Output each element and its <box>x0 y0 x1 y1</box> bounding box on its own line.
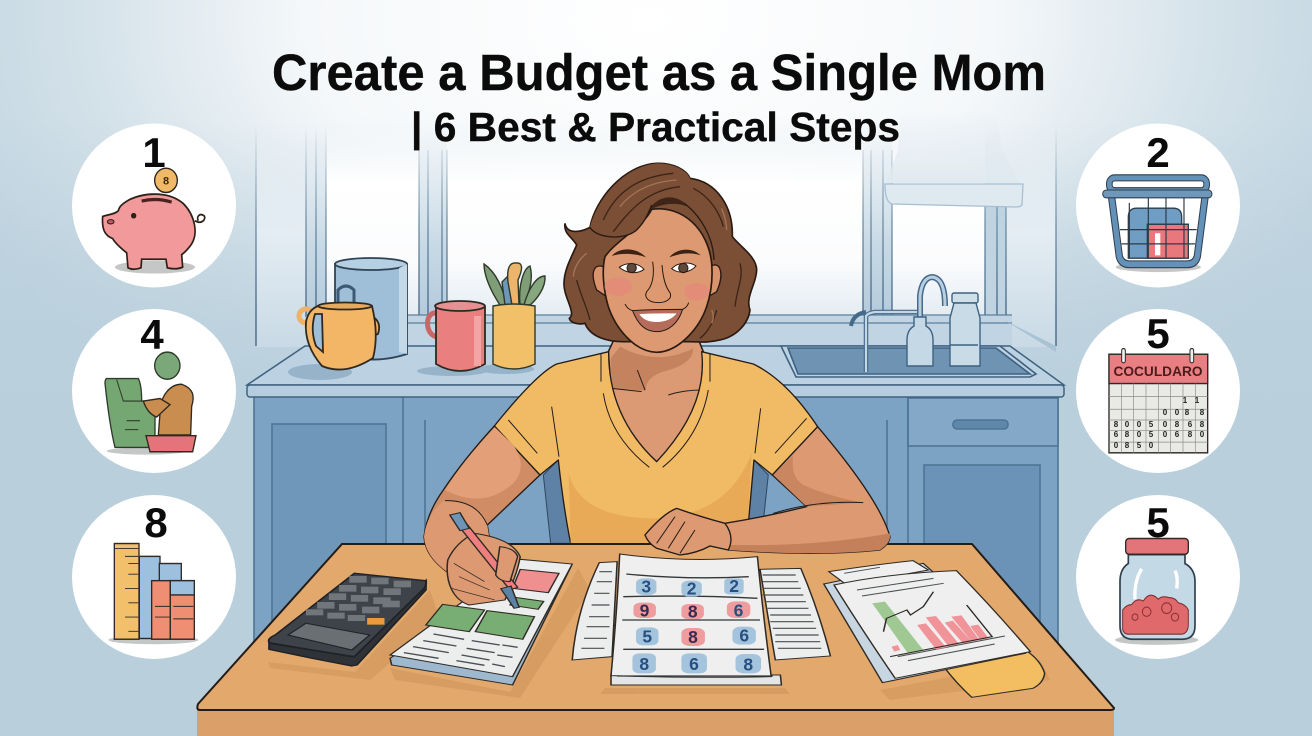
calendar days: 5 <box>1149 420 1154 429</box>
calendar days: 0 <box>1175 408 1180 417</box>
faucet <box>851 277 945 372</box>
calendar days: 8 <box>1188 430 1193 439</box>
worksheet numbers: 6 <box>739 626 749 646</box>
sink <box>781 346 1036 377</box>
range hood <box>885 110 1023 207</box>
worksheet numbers: 8 <box>743 654 753 674</box>
table <box>197 544 1114 736</box>
step badge: calendar: 5 <box>1146 310 1170 357</box>
kitchen background <box>247 110 1064 646</box>
calculator <box>269 573 426 666</box>
calendar days: 0 <box>1200 430 1205 439</box>
worksheet numbers: 3 <box>641 577 651 597</box>
mouth <box>633 309 683 332</box>
step badge: stacked books: 8 <box>144 499 168 546</box>
chair back <box>543 460 768 543</box>
worksheet numbers: 2 <box>687 579 697 599</box>
worksheet numbers: 5 <box>642 626 652 646</box>
worksheet highlights <box>632 578 761 673</box>
step badge: piggy bank <box>72 124 236 288</box>
calendar days: 8 <box>1175 420 1180 429</box>
worksheet numbers: 8 <box>688 627 698 647</box>
step badge: piggy bank: 1 <box>142 129 166 176</box>
ears <box>593 265 721 297</box>
calendar days: 5 <box>1149 430 1154 439</box>
eyes <box>619 263 696 273</box>
coin glyph: 8 <box>163 176 169 188</box>
right arm <box>725 427 890 553</box>
calendar days: 8 <box>1125 430 1130 439</box>
calendar days: 0 <box>1137 430 1142 439</box>
calendar days: 6 <box>1175 430 1180 439</box>
worksheet <box>611 554 781 685</box>
cup: large blue <box>335 258 407 360</box>
step badge: shopping basket <box>1076 124 1240 288</box>
calendar days: 0 <box>1137 420 1142 429</box>
step badge: shopping basket: 2 <box>1146 129 1170 176</box>
hair <box>564 163 757 342</box>
window <box>256 115 1056 352</box>
worksheet numbers: 6 <box>689 654 699 674</box>
worksheet numbers: 9 <box>640 600 650 620</box>
writing hand <box>447 513 520 608</box>
worksheet back pages <box>572 562 830 660</box>
calendar days: 0 <box>1125 420 1130 429</box>
title line 2: | 6 Best & Practical Steps <box>411 104 900 150</box>
worksheet numbers <box>639 576 753 674</box>
nose <box>646 262 671 303</box>
arms <box>424 426 890 573</box>
woman upper body <box>494 327 818 543</box>
calendar days: 8 <box>1125 441 1130 450</box>
counter shadows <box>288 364 534 380</box>
mug: yellow <box>299 302 379 370</box>
envelope <box>944 650 1045 697</box>
calendar days: 8 <box>1114 420 1119 429</box>
table shadows <box>268 568 1050 700</box>
calendar days <box>1114 396 1205 450</box>
cabinets <box>254 396 1058 646</box>
worksheet numbers: 8 <box>688 602 698 622</box>
resting hand <box>645 508 731 555</box>
calendar days: 0 <box>1114 441 1119 450</box>
calendar days: 8 <box>1200 408 1205 417</box>
worksheet numbers: 8 <box>639 654 649 674</box>
calendar days: 0 <box>1163 420 1168 429</box>
soap bottle <box>907 317 933 366</box>
budget booklet <box>390 559 572 685</box>
calendar days: 6 <box>1114 430 1119 439</box>
calendar days: 0 <box>1149 441 1154 450</box>
hair strands <box>573 173 741 338</box>
worksheet numbers: 6 <box>734 600 744 620</box>
step badge: savings deposit <box>72 309 236 473</box>
left arm <box>424 426 540 573</box>
glass jar <box>950 293 980 366</box>
chart report <box>824 561 1030 683</box>
step badge: savings deposit: 4 <box>140 311 164 358</box>
cheeks <box>604 277 709 300</box>
title line 1: Create a Budget as a Single Mom <box>272 44 1046 101</box>
mug: red <box>428 301 485 371</box>
face <box>603 209 712 352</box>
step badge: stacked books <box>72 495 236 659</box>
calendar days: 5 <box>1137 441 1142 450</box>
fringe <box>590 163 714 260</box>
title <box>272 44 1046 150</box>
countertop <box>247 346 1064 397</box>
neck and chest <box>608 327 703 462</box>
worksheet numbers: 2 <box>729 576 739 596</box>
step badge: savings jar: 5 <box>1146 499 1170 546</box>
calendar days: 0 <box>1163 430 1168 439</box>
eyebrows <box>612 249 701 257</box>
pencil cup with utensils <box>484 263 545 369</box>
step badge: savings jar <box>1076 495 1240 659</box>
calendar days: 6 <box>1188 420 1193 429</box>
calendar days: 1 <box>1183 396 1188 405</box>
calendar days: 1 <box>1195 396 1200 405</box>
step badge: calendar <box>1076 309 1240 473</box>
calendar days: 8 <box>1200 420 1205 429</box>
shirt <box>494 352 818 543</box>
calendar heading: COCULDARO <box>1114 364 1202 379</box>
calendar days: 0 <box>1163 408 1168 417</box>
head <box>564 163 757 352</box>
desk items <box>269 513 1045 697</box>
calendar days: 8 <box>1185 408 1190 417</box>
